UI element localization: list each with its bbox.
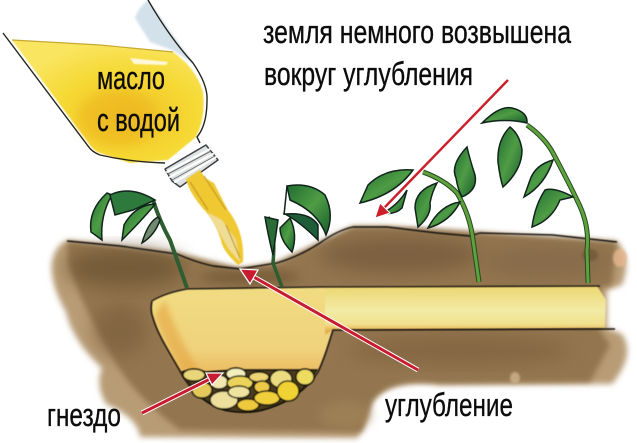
plant: second wilted (265, 185, 330, 287)
plant: third seedling (360, 147, 479, 282)
label: pit: углубление (385, 387, 513, 423)
arrow: pit (240, 269, 418, 370)
soil (52, 227, 627, 438)
arrow: nest (142, 373, 223, 413)
bottle neck (165, 145, 218, 187)
label: oil line 1: масло (97, 60, 165, 96)
plant: tall right seedling (482, 108, 588, 283)
label: raised soil line 2: вокруг углубления (264, 56, 473, 92)
label: oil line 2: с водой (97, 102, 180, 138)
bottle with oil and water (3, 0, 218, 187)
yellow pit and tunnel (151, 286, 615, 412)
label: nest: гнездо (47, 397, 121, 433)
seeds in the nest (182, 368, 317, 412)
arrow: raised soil (375, 80, 508, 218)
poured liquid stream (186, 170, 243, 265)
plant: left wilted (91, 191, 187, 288)
